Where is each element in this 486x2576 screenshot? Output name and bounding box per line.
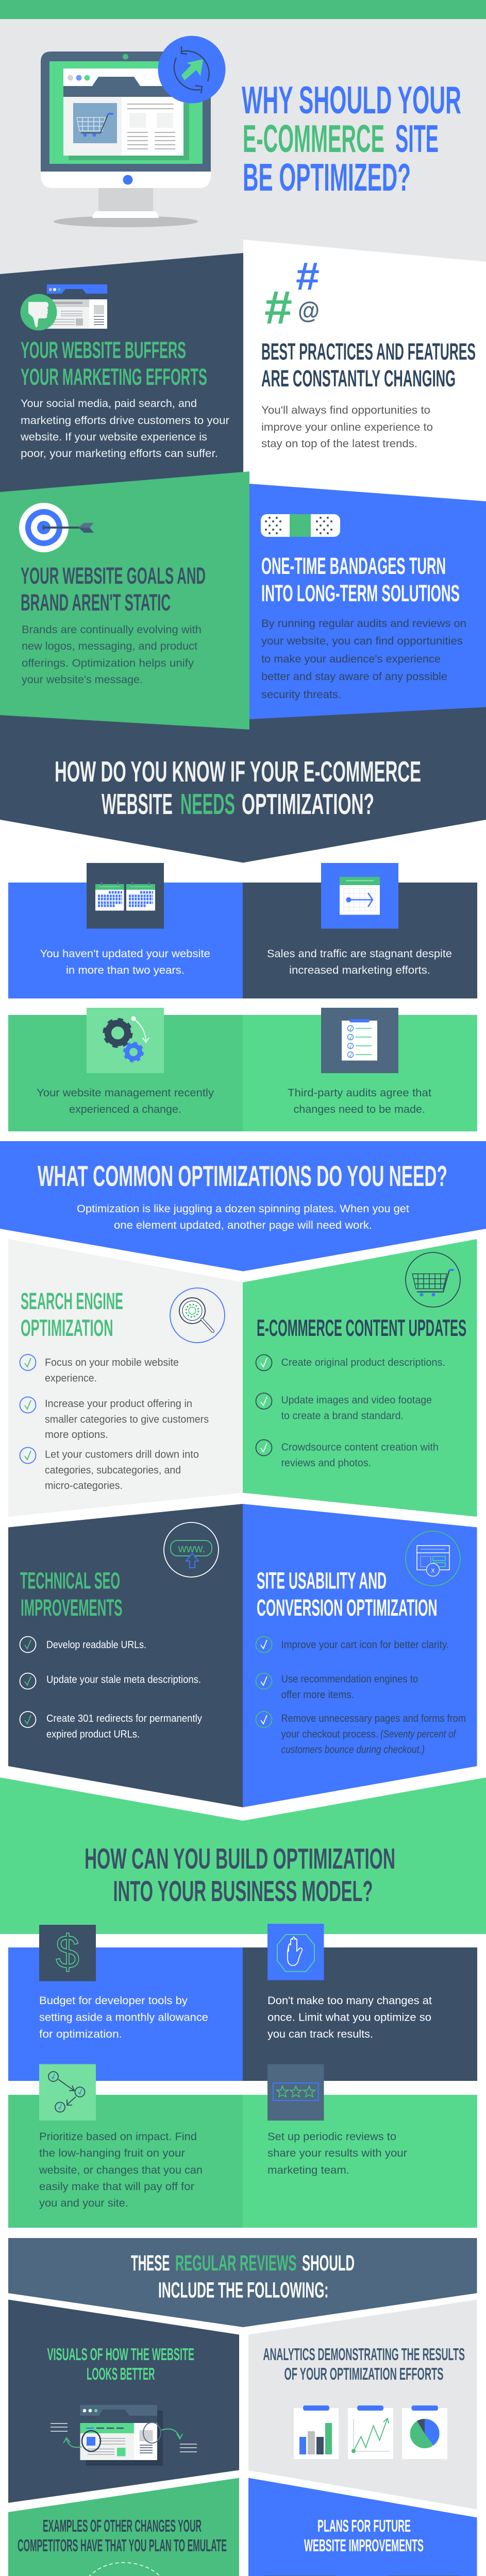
icon: stop hand xyxy=(267,1924,324,1980)
title: SITE xyxy=(395,117,439,160)
heading: INCLUDE THE FOLLOWING: xyxy=(158,2278,329,2303)
text: Sales and traffic are stagnant despite xyxy=(267,948,452,960)
body text: offerings. Optimization helps unify xyxy=(22,657,194,669)
panel: best practices xyxy=(243,240,486,505)
panel: visuals xyxy=(8,2300,239,2503)
text: for optimization. xyxy=(39,2028,122,2040)
text: you can track results. xyxy=(267,2028,373,2040)
section background: know if your site needs optimization xyxy=(0,696,486,862)
heading xyxy=(21,337,207,390)
checklist xyxy=(20,1354,209,1492)
body text: your website, you can find opportunities xyxy=(261,635,463,647)
body text xyxy=(261,618,466,701)
checklist: expired product URLs. xyxy=(46,1729,140,1740)
icon: magnifier with gear xyxy=(170,1288,225,1343)
heading xyxy=(131,2251,355,2303)
icon: target with arrow xyxy=(19,503,94,552)
text: you and your site. xyxy=(39,2197,128,2209)
icon: calendar with arrow xyxy=(321,863,398,928)
body text: security threats. xyxy=(261,689,341,701)
icon: refresh badge with growth arrow xyxy=(158,36,226,103)
text: Budget for developer tools by xyxy=(39,1995,188,2007)
text: Set up periodic reviews to xyxy=(267,2131,396,2143)
checklist: Create original product descriptions. xyxy=(281,1357,445,1368)
illustration: current site browser xyxy=(265,2575,341,2576)
panel: website goals xyxy=(0,471,249,730)
checklist: Remove unnecessary pages and forms from xyxy=(281,1713,466,1724)
checklist: Update images and video footage xyxy=(281,1395,432,1406)
icon: hashtags and at sign: @ xyxy=(298,297,320,324)
icon: dollar sign xyxy=(39,1925,96,1981)
banner: regular reviews xyxy=(8,2238,477,2327)
heading xyxy=(263,2345,465,2383)
checklist: Crowdsource content creation with xyxy=(281,1442,439,1453)
heading: YOUR MARKETING EFFORTS xyxy=(21,364,207,390)
body text: By running regular audits and reviews on xyxy=(261,618,466,630)
illustration: monitor with shopping page xyxy=(41,52,211,227)
heading: how do you know: OPTIMIZATION? xyxy=(242,788,374,821)
checklist: micro-categories. xyxy=(45,1480,123,1492)
panel: future plans xyxy=(248,2478,477,2576)
heading: IMPROVEMENTS xyxy=(21,1595,123,1621)
panel: e-commerce content updates xyxy=(243,1239,477,1517)
text: setting aside a monthly allowance xyxy=(39,2011,208,2024)
heading: YOUR WEBSITE BUFFERS xyxy=(21,337,186,363)
text xyxy=(40,948,210,976)
text: increased marketing efforts. xyxy=(289,964,430,976)
hero background xyxy=(0,19,486,287)
heading: SEARCH ENGINE xyxy=(21,1288,123,1314)
panel: technical seo xyxy=(8,1504,243,1807)
checklist: categories, subcategories, and xyxy=(45,1465,181,1476)
body text: poor, your marketing efforts can suffer. xyxy=(21,448,218,460)
text: share your results with your xyxy=(267,2147,407,2159)
illustration: improved site browser xyxy=(389,2575,464,2576)
heading xyxy=(304,2516,424,2555)
panel: management change xyxy=(8,1008,243,1131)
heading: TECHNICAL SEO xyxy=(20,1567,120,1594)
heading xyxy=(47,2345,194,2383)
panel: site usability and conversion xyxy=(243,1504,477,1807)
icon: prioritized steps xyxy=(39,2064,96,2121)
text: You haven't updated your website xyxy=(40,948,210,960)
heading: BRAND AREN'T STATIC xyxy=(21,589,171,616)
panel: limit changes xyxy=(243,1924,477,2081)
panel: stagnant sales xyxy=(243,863,477,998)
text: website, or changes that you can xyxy=(39,2164,203,2176)
body text: marketing efforts drive customers to your xyxy=(21,415,229,427)
checklist: Focus on your mobile website xyxy=(45,1357,179,1368)
section background: build optimization xyxy=(0,1777,486,1934)
heading: build optimization xyxy=(85,1842,395,1908)
body text: to make your audience's experience xyxy=(261,653,441,665)
text: Don't make too many changes at xyxy=(267,1995,432,2007)
text: easily make that will pay off for xyxy=(39,2181,194,2193)
panel: competitor examples: COMPETITORS HAVE THAT YOU PLAN TO EMULATE xyxy=(18,2536,227,2555)
chart: bars on clipboard xyxy=(294,2405,339,2459)
heading xyxy=(257,1567,437,1621)
body text: Your social media, paid search, and xyxy=(21,398,197,410)
intro text: one element updated, another page will need work. xyxy=(114,1219,372,1231)
illustration: browser with dashed orbit xyxy=(71,2563,177,2576)
panel: periodic reviews xyxy=(243,2064,477,2228)
icon: bandage xyxy=(261,514,340,537)
heading: how do you know: WEBSITE xyxy=(102,788,173,821)
panel: competitor examples xyxy=(8,2478,239,2576)
text xyxy=(267,948,452,976)
icon: hashtags and at sign: # xyxy=(264,282,292,334)
icon: checklist clipboard xyxy=(321,1008,398,1073)
heading: OPTIMIZATION xyxy=(21,1315,113,1341)
heading: SHOULD xyxy=(302,2251,355,2276)
banner: common optimizations xyxy=(0,1141,486,1272)
icon: shopping cart xyxy=(406,1252,460,1307)
checklist: Create 301 redirects for permanently xyxy=(46,1713,202,1724)
heading xyxy=(18,2516,227,2555)
heading: how do you know xyxy=(55,755,421,821)
checklist: Improve your cart icon for better clarity. xyxy=(281,1639,449,1651)
icon: dollar sign: $ xyxy=(56,1926,79,1978)
text: Prioritize based on impact. Find xyxy=(39,2131,197,2143)
heading: SITE USABILITY AND xyxy=(257,1567,387,1594)
heading: REGULAR REVIEWS xyxy=(175,2251,297,2276)
icon: www address bar xyxy=(164,1522,219,1577)
checklist: your checkout process. xyxy=(281,1729,378,1740)
intro text: Optimization is like juggling a dozen spinning plates. When you get xyxy=(77,1203,409,1215)
icon: hashtags and at sign xyxy=(264,255,320,334)
heading xyxy=(21,1288,123,1341)
top band xyxy=(0,0,486,19)
title xyxy=(242,78,461,199)
icon: star rating xyxy=(267,2064,324,2121)
heading: LOOKS BETTER xyxy=(87,2364,155,2383)
body text: better and stay aware of any possible xyxy=(261,671,447,683)
heading: YOUR WEBSITE GOALS AND xyxy=(21,563,206,589)
text: in more than two years. xyxy=(66,964,185,976)
text xyxy=(39,2131,203,2209)
checklist: Develop readable URLs. xyxy=(46,1639,146,1651)
checklist: Increase your product offering in xyxy=(45,1398,192,1410)
panel: one-time bandages xyxy=(243,483,486,720)
body text: stay on top of the latest trends. xyxy=(261,438,417,450)
text: experienced a change. xyxy=(69,1104,181,1115)
checklist: Let your customers drill down into xyxy=(45,1449,199,1460)
illustration: browser comparison xyxy=(51,2405,197,2466)
text xyxy=(37,1087,214,1115)
heading xyxy=(20,1567,123,1621)
chart: pie on clipboard xyxy=(402,2405,447,2459)
checklist: to create a brand standard. xyxy=(281,1411,404,1422)
heading xyxy=(21,563,206,616)
body text: Brands are continually evolving with xyxy=(22,624,202,636)
checklist: Update your stale meta descriptions. xyxy=(46,1674,201,1686)
panel: not updated in two years xyxy=(8,863,243,998)
panel: third-party audits xyxy=(243,1008,477,1131)
heading: THESE xyxy=(131,2251,170,2276)
panel: search engine optimization xyxy=(8,1239,243,1517)
checklist: reviews and photos. xyxy=(281,1458,371,1469)
body text xyxy=(20,398,229,460)
text: once. Limit what you optimize so xyxy=(267,2011,431,2024)
text: changes need to be made. xyxy=(294,1104,425,1115)
icon: browser with x xyxy=(406,1531,460,1586)
checklist: customers bounce during checkout.) xyxy=(281,1744,425,1756)
icon: hashtags and at sign: # xyxy=(296,255,320,298)
heading: how do you know: NEEDS xyxy=(180,788,235,821)
checklist xyxy=(256,1355,445,1469)
panel: prioritize xyxy=(8,2064,243,2228)
body text: your website's message. xyxy=(22,674,143,686)
text: marketing team. xyxy=(267,2164,349,2176)
text xyxy=(39,1995,208,2040)
checklist: offer more items. xyxy=(281,1689,354,1701)
body text: new logos, messaging, and product xyxy=(22,640,197,652)
icon: www address bar: www. xyxy=(178,1542,205,1555)
text: Third-party audits agree that xyxy=(288,1087,431,1099)
text xyxy=(288,1087,431,1115)
body text xyxy=(22,624,202,686)
icon: gears xyxy=(87,1008,164,1073)
checklist xyxy=(20,1636,202,1740)
body text xyxy=(261,404,433,450)
panel: website buffers xyxy=(0,253,243,515)
text: the low-hanging fruit on your xyxy=(39,2147,185,2159)
checklist: experience. xyxy=(45,1372,97,1384)
body text: You'll always find opportunities to xyxy=(261,404,430,416)
checklist: Use recommendation engines to xyxy=(281,1673,418,1685)
chart: line on clipboard xyxy=(348,2405,393,2459)
body text: improve your online experience to xyxy=(261,421,433,433)
checklist: (Seventy percent of xyxy=(380,1729,457,1740)
panel: budget xyxy=(8,1925,243,2081)
checklist xyxy=(256,1636,466,1756)
icon: two calendars xyxy=(87,863,164,928)
icon: browser with x: x xyxy=(431,1566,435,1574)
checklist: more options. xyxy=(45,1429,108,1440)
heading: VISUALS OF HOW THE WEBSITE xyxy=(47,2345,194,2364)
text xyxy=(267,2131,407,2176)
panel: analytics xyxy=(248,2300,477,2509)
heading xyxy=(261,553,460,606)
icon: thumbs down on browser xyxy=(21,284,107,331)
heading: PLANS FOR FUTURE xyxy=(317,2516,411,2535)
heading: EXAMPLES OF OTHER CHANGES YOUR xyxy=(43,2516,202,2535)
body text: website. If your website experience is xyxy=(20,431,207,443)
text: Your website management recently xyxy=(37,1087,214,1099)
intro text xyxy=(77,1203,409,1231)
text xyxy=(267,1995,432,2040)
heading xyxy=(261,338,476,392)
checklist: smaller categories to give customers xyxy=(45,1414,209,1425)
